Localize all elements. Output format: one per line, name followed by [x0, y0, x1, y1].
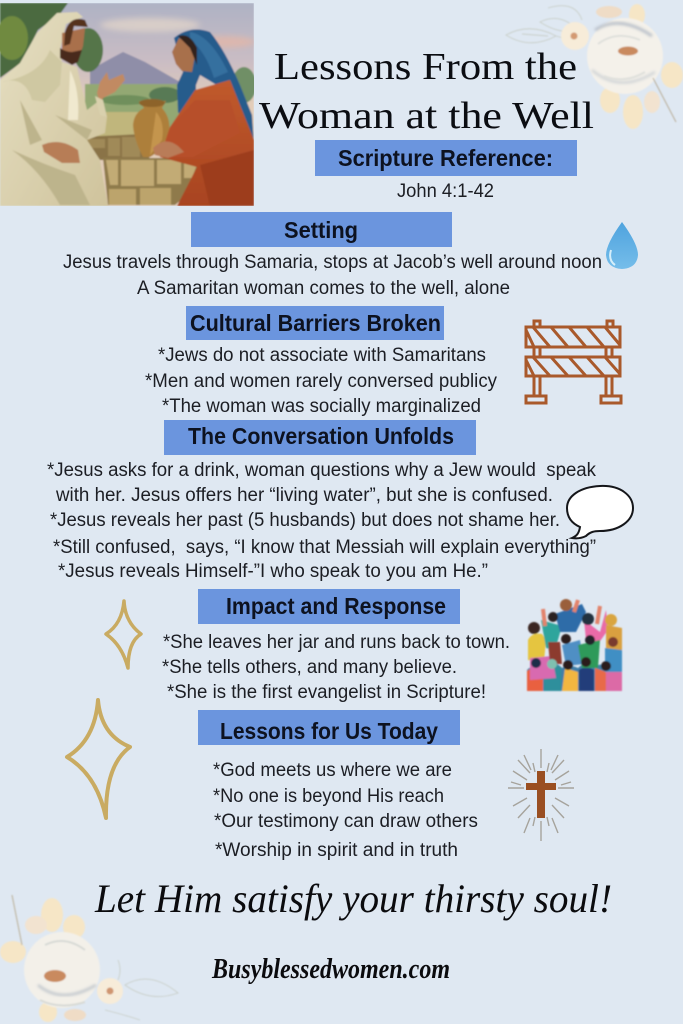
jar: [133, 101, 169, 157]
text: John 4:1-42: John 4:1-42: [397, 181, 494, 202]
heading: Lessons for Us Today: [198, 710, 460, 745]
text: Setting: Jesus travels through Samaria, stops at Jacob’s well around noon: [63, 252, 602, 273]
text: closing script line: Let Him satisfy your thirsty soul!: [94, 876, 612, 921]
Jesus face, hair, beard: [61, 28, 86, 54]
text: Cultural Barriers: [145, 345, 497, 417]
text: The Conversation: *Still confused, says, “I know that Messiah will explain everything”: [53, 537, 596, 558]
text: The Conversation: *Jesus asks for a drink, woman questions why a Jew would speak: [47, 460, 596, 481]
text: Lessons for Us Today: *Our testimony can draw others: [214, 811, 478, 832]
text: The Conversation: *Jesus reveals her past (5 husbands) but does not shame her.: [50, 510, 560, 531]
text: Lessons for Us Today: *Worship in spirit and in truth: [215, 840, 458, 861]
woman veil: [174, 30, 254, 145]
title: [259, 46, 594, 137]
text: website: Busyblessedwomen.com: [211, 954, 450, 985]
resting hand: [42, 142, 80, 163]
heading: Scripture Reference: [315, 140, 577, 176]
icon: large gold star: [67, 700, 130, 818]
title: Lessons From the: [274, 46, 577, 88]
woman hands: [153, 141, 184, 158]
woman face and hair: [172, 38, 195, 72]
decoration: top-right flower: [506, 4, 683, 129]
text: The Conversation: [47, 460, 596, 582]
heading: The Conversation Unfolds: [164, 420, 476, 455]
icon: crowd of people: [527, 599, 622, 691]
icon: road barrier: [526, 321, 621, 403]
Jesus robe and hood: [0, 12, 108, 206]
text: Lessons for Us Today: [213, 760, 478, 861]
text: Cultural Barriers: *The woman was socially marginalized: [162, 396, 481, 417]
text: The Conversation: with her. Jesus offers her “living water”, but she is confused.: [55, 485, 553, 506]
heading: Scripture Reference: Scripture Reference:: [338, 145, 553, 171]
illustration: Jesus and the woman at the well: [0, 3, 256, 206]
text: Lessons for Us Today: *God meets us where we are: [213, 760, 452, 781]
icon: cross with rays: [508, 749, 574, 841]
heading: Impact and Response: Impact and Response: [226, 593, 446, 619]
text: The Conversation: *Jesus reveals Himself-”I who speak to you am He.”: [58, 561, 488, 582]
icon: small gold star: [106, 601, 141, 668]
heading: Lessons for Us Today: Lessons for Us Today: [220, 718, 438, 744]
well back ring: [90, 134, 150, 161]
text: Setting: A Samaritan woman comes to the well, alone: [137, 278, 510, 299]
text: Impact and Response: *She leaves her jar and runs back to town.: [163, 632, 510, 653]
decoration: bottom-left flower: [0, 895, 178, 1022]
heading: Setting: Setting: [284, 217, 358, 243]
woman dress: [160, 80, 254, 206]
text: Cultural Barriers: *Jews do not associate with Samaritans: [158, 345, 486, 366]
text: Impact and Response: [162, 632, 510, 703]
icon: water drop: [606, 222, 638, 269]
text: Impact and Response: *She is the first evangelist in Scripture!: [167, 682, 486, 703]
heading: The Conversation Unfolds: The Conversation Unfolds: [188, 423, 454, 449]
title: Woman at the Well: [259, 95, 594, 137]
trees: [0, 3, 68, 78]
text: Setting: [63, 252, 602, 299]
text: Lessons for Us Today: *No one is beyond His reach: [213, 786, 444, 807]
text: Cultural Barriers: *Men and women rarely conversed publicy: [145, 371, 497, 392]
heading: Impact and Response: [198, 589, 460, 624]
raised hand: [96, 72, 126, 100]
heading: Setting: [191, 212, 452, 247]
text: Impact and Response: *She tells others, and many believe.: [162, 657, 457, 678]
heading: Cultural Barriers Broken: Cultural Barriers Broken: [190, 310, 441, 336]
icon: speech bubble: [567, 486, 633, 538]
sky and landscape: [0, 3, 254, 206]
